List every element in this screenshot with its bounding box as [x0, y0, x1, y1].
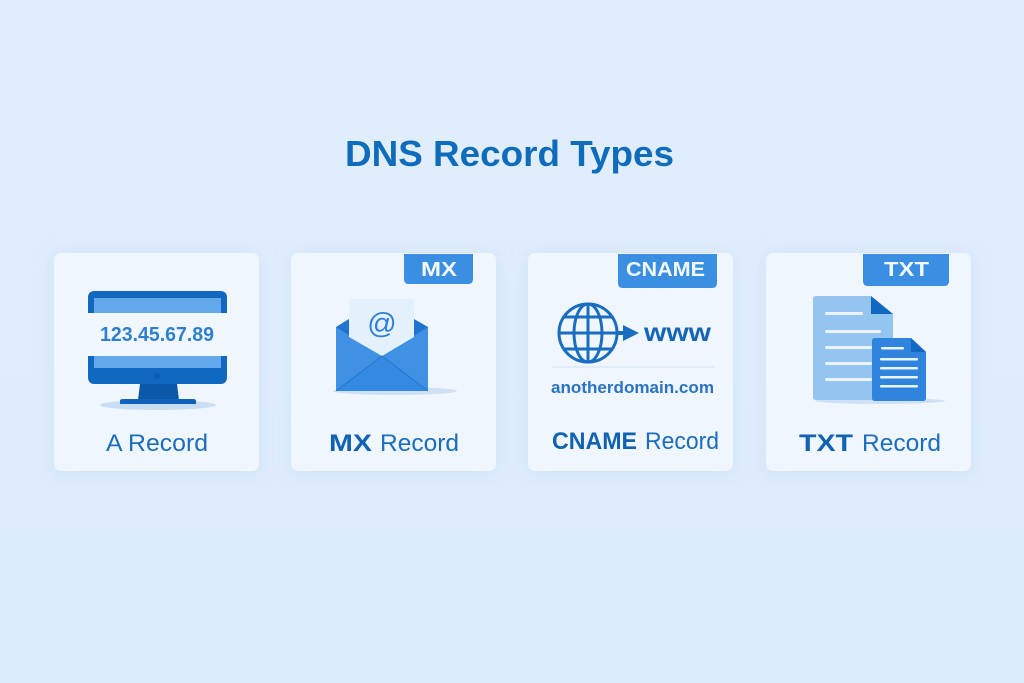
tag: CNAME: CNAME [626, 259, 705, 281]
tag: CNAME [618, 254, 717, 288]
www text: www [643, 317, 712, 347]
tag: MX [404, 254, 473, 284]
label: CNAME Record: Record [645, 428, 719, 455]
panel: MX Record [291, 253, 496, 471]
divider [552, 366, 715, 368]
label: TXT Record: Record [862, 430, 941, 457]
icon: envelope with at sign [333, 299, 457, 395]
icon: documents [813, 296, 945, 404]
label: CNAME Record [552, 428, 719, 455]
label: MX Record: MX [329, 430, 372, 457]
panel: TXT Record [766, 253, 971, 471]
at sign: @ [367, 308, 397, 340]
label: CNAME Record: CNAME [552, 428, 637, 455]
title: DNS Record Types [345, 133, 674, 174]
tag: TXT: TXT [884, 259, 929, 281]
label: TXT Record: TXT [799, 430, 853, 457]
label: A Record: A Record [106, 430, 208, 457]
label: TXT Record [799, 430, 941, 457]
tag: TXT [863, 254, 949, 286]
domain text: anotherdomain.com [551, 378, 714, 397]
panel: CNAME Record [528, 253, 733, 471]
panel: A Record [54, 253, 259, 471]
tag: MX: MX [421, 259, 458, 281]
icon: globe with arrow [559, 304, 639, 362]
label: MX Record [329, 430, 459, 457]
IP address: 123.45.67.89 [100, 324, 214, 346]
label: MX Record: Record [380, 430, 459, 457]
icon: monitor with IP address [88, 291, 227, 410]
